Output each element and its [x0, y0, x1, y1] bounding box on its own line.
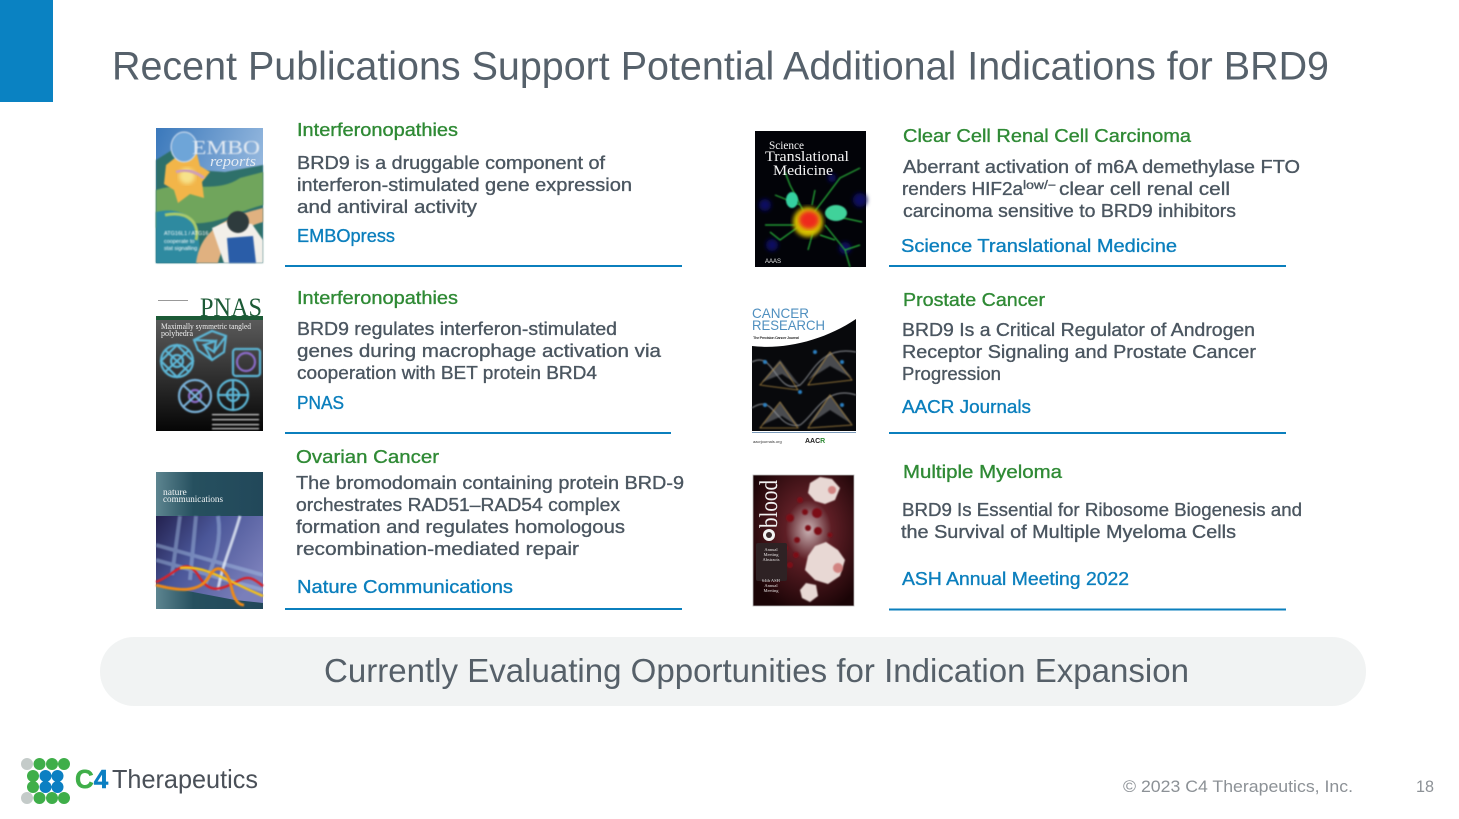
description: BRD9 Is a Critical Regulator of Androgen	[902, 319, 1255, 340]
journal cover: Science Translational Medicine	[755, 131, 867, 267]
journal source: AACR Journals	[902, 396, 1031, 417]
journal cover: Blood: Abstracts	[762, 557, 780, 562]
description	[902, 156, 1300, 221]
journal cover: PNAS: polyhedra	[161, 329, 193, 338]
journal cover: PNAS: PNAS	[200, 293, 262, 322]
journal cover: Cancer Research	[752, 304, 856, 445]
journal cover: Nature Communications	[156, 472, 263, 609]
description: clear cell renal cell	[1059, 178, 1230, 199]
journal cover: EMBO reports: ATG16L1 / ATG16	[164, 231, 208, 237]
panel: Cancer Research publication	[752, 289, 1286, 445]
journal cover: EMBO reports: reports	[210, 154, 256, 170]
journal cover: Science Translational Medicine: AAAS	[765, 259, 781, 265]
description	[902, 319, 1256, 384]
journal cover: Cancer Research: CANCER	[752, 305, 809, 321]
journal source: EMBOpress	[297, 225, 395, 246]
journal source: Science Translational Medicine	[901, 235, 1177, 256]
panel: Blood publication	[753, 461, 1302, 610]
description: formation and regulates homologous	[296, 516, 625, 537]
journal cover: Science Translational Medicine: Translational	[765, 149, 849, 165]
journal source: Nature Communications	[297, 576, 513, 597]
heading: interferonopathies: Interferonopathies	[297, 119, 458, 140]
journal source: PNAS	[297, 392, 344, 413]
description: and antiviral activity	[297, 196, 478, 217]
journal cover: Blood: 64th ASH	[762, 578, 781, 583]
description: Aberrant activation of m6A demethylase FTO	[903, 156, 1300, 177]
description	[296, 472, 684, 559]
journal cover: EMBO reports: cooperate to	[164, 239, 195, 245]
journal cover: EMBO reports	[156, 128, 263, 263]
journal cover: Blood: Meeting	[764, 588, 779, 593]
journal cover: EMBO reports: stat signalling	[164, 246, 197, 252]
description: BRD9 Is Essential for Ribosome Biogenesis and	[902, 499, 1302, 520]
description: renders HIF2a	[902, 178, 1024, 199]
journal cover: Blood: Annual	[764, 547, 778, 552]
journal cover: Cancer Research: RESEARCH	[752, 317, 825, 333]
panel: Nature Communications publication	[156, 446, 684, 610]
description: low/−	[1023, 180, 1056, 192]
heading: prostate cancer: Prostate Cancer	[903, 289, 1045, 310]
callout: indication expansion	[100, 637, 1366, 706]
journal cover: EMBO reports: EMBO	[192, 137, 260, 159]
journal cover: Science Translational Medicine: Medicine	[773, 163, 833, 179]
description: the Survival of Multiple Myeloma Cells	[901, 521, 1236, 542]
panel: EMBO reports publication	[156, 119, 682, 267]
icon: dot grid	[21, 758, 70, 804]
description: The bromodomain containing protein BRD-9	[296, 472, 684, 493]
journal cover: Blood: Annual	[764, 583, 778, 588]
description: cooperation with BET protein BRD4	[297, 362, 597, 383]
description	[297, 152, 632, 217]
description: interferon-stimulated gene expression	[297, 174, 632, 195]
panel: PNAS publication	[156, 287, 671, 434]
journal cover: Blood: blood	[756, 480, 783, 528]
description: BRD9 regulates interferon-stimulated	[297, 318, 617, 339]
logo wordmark: Therapeutics	[112, 764, 258, 794]
description: carcinoma sensitive to BRD9 inhibitors	[903, 200, 1236, 221]
heading: multiple myeloma: Multiple Myeloma	[903, 461, 1063, 482]
description: Progression	[902, 363, 1001, 384]
journal source: ASH Annual Meeting 2022	[902, 568, 1129, 589]
logo: C4 Therapeutics	[21, 758, 258, 804]
copyright: © 2023 C4 Therapeutics, Inc.	[1123, 777, 1353, 796]
journal cover: Cancer Research: The Precision Cancer Journal	[753, 335, 799, 340]
journal cover: Cancer Research: AACR	[805, 438, 825, 445]
description	[297, 318, 662, 383]
journal cover: Blood	[753, 475, 854, 606]
heading: ovarian cancer: Ovarian Cancer	[296, 446, 439, 467]
page number: 18	[1416, 777, 1434, 796]
accent block	[0, 0, 53, 102]
panel: Science Translational Medicine publication	[755, 125, 1300, 267]
callout: indication expansion: Currently Evaluating Opportunities for Indication Expansion	[324, 652, 1189, 689]
description	[901, 499, 1302, 542]
journal cover: Blood: Meeting	[764, 552, 779, 557]
description: Receptor Signaling and Prostate Cancer	[902, 341, 1256, 362]
heading: clear cell renal cell carcinoma: Clear Cell Renal Cell Carcinoma	[903, 125, 1192, 146]
description: orchestrates RAD51–RAD54 complex	[296, 494, 621, 515]
journal cover: Nature Communications: nature	[163, 488, 187, 498]
title: Recent Publications Support Potential Additional Indications for BRD9	[112, 44, 1329, 88]
logo wordmark: C4	[75, 764, 109, 794]
description: BRD9 is a druggable component of	[297, 152, 606, 173]
description: genes during macrophage activation via	[297, 340, 662, 361]
description: recombination-mediated repair	[296, 538, 579, 559]
journal cover: PNAS	[156, 293, 263, 431]
journal cover: Science Translational Medicine: Science	[769, 138, 804, 152]
journal cover: PNAS: Maximally symmetric tangled	[161, 322, 251, 331]
journal cover: Cancer Research: aacrjournals.org	[753, 439, 782, 444]
journal cover: Nature Communications: communications	[163, 495, 223, 505]
heading: interferonopathies: Interferonopathies	[297, 287, 458, 308]
